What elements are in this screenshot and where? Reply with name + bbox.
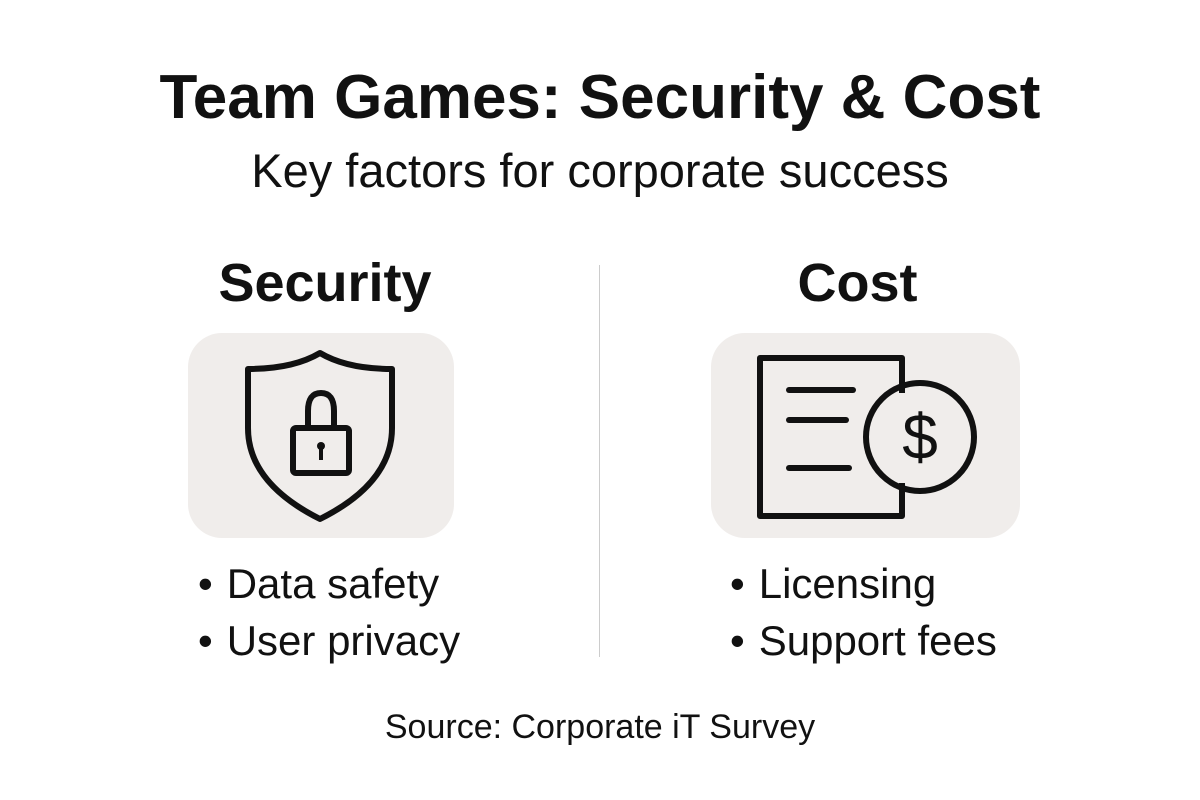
divider bbox=[599, 265, 600, 657]
bullet list: security: User privacy bbox=[227, 617, 460, 664]
icon: shield lock bbox=[188, 333, 454, 538]
bullet list: cost: Licensing bbox=[759, 560, 936, 607]
bullet list: security bbox=[200, 560, 460, 664]
bullet list: cost: Support fees bbox=[759, 617, 997, 664]
heading: security: Security bbox=[218, 253, 432, 313]
panel: cost bbox=[711, 253, 1020, 664]
icon: invoice with dollar coin: $ bbox=[902, 401, 938, 473]
subtitle: Key factors for corporate success bbox=[251, 144, 949, 197]
bullet list: cost bbox=[732, 560, 997, 664]
title: Team Games: Security & Cost bbox=[160, 63, 1040, 132]
heading: cost: Cost bbox=[798, 253, 918, 313]
bullet list: security: Data safety bbox=[227, 560, 439, 607]
icon: invoice with dollar coin bbox=[711, 333, 1020, 538]
panel: security bbox=[188, 253, 460, 664]
source: Source: Corporate iT Survey bbox=[385, 708, 815, 746]
